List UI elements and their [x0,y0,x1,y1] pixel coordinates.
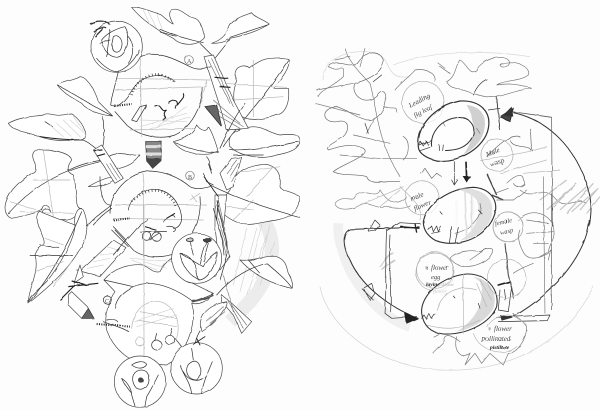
top arrow head and frame [503,107,591,227]
panel: fig A [115,43,211,137]
fig letter labels [105,59,192,305]
note: leading fig leaf: Leading [407,92,432,110]
fig letter labels: C [105,299,109,305]
note: female flower pollinated: pollinated [481,335,511,343]
panel: fig C [97,205,213,365]
panel: life cycle sketch diagram [105,48,600,370]
lower right leaf and stem [203,157,300,270]
note: male wasp: wasp [489,156,506,169]
inset: fertilised flower circle [114,356,166,407]
arrows between figs [452,162,471,185]
note: female flower egg laying: ♀ flower [424,264,449,272]
note: male wasp [476,134,518,176]
label A [185,56,193,64]
fig: middle [423,173,527,243]
inset: flower circle A [90,21,142,107]
note: male wasp: Male [484,146,501,159]
note: female flower egg laying: egg [431,274,441,281]
note: male flower [399,175,445,220]
note: leading fig leaf: fig leaf [413,103,435,119]
note: female wasp: female [494,217,513,228]
panel: fig tree life cycle illustration [5,7,300,407]
inset: bud circle [171,337,222,394]
note: female flower pollinated [481,325,512,351]
dark arrow on branch [205,105,222,127]
note: leading fig leaf [395,74,451,131]
note: female flower egg laying [416,253,454,295]
shield arrow [146,142,162,168]
note: female flower egg laying: laying/distal [426,282,454,288]
label C [103,296,111,304]
left large leaves [5,150,112,227]
faint shading [320,223,593,370]
note: male flower: flower [412,198,432,213]
oak leaves sketch [315,48,600,227]
note: male flower: male [409,190,425,203]
pencil shaped branch [60,227,128,318]
note: female wasp [490,209,526,245]
note: female wasp: wasp [499,227,515,237]
panel: fig B [110,171,210,257]
loose lower leaves [450,248,493,266]
lower left leaf [28,209,87,303]
note: female flower pollinated: ♀ flower [487,325,512,333]
inset: stamens circle [172,233,222,283]
fig: bottom [417,212,554,365]
fig letter labels: A [187,59,192,65]
note: female flower egg laying: flower [433,288,448,295]
right lower leaf and stem [195,205,293,347]
fig letter labels: B [188,175,192,181]
fig: top [418,98,513,161]
faint background ring [230,212,275,322]
wasps [115,104,132,106]
label B [186,171,194,180]
leaves and branch: upper section [8,7,300,187]
label circles and notes [105,59,526,351]
cycle arrows and box [344,177,589,323]
note: female flower pollinated: pistillate [489,345,510,351]
branch strips [93,145,123,183]
